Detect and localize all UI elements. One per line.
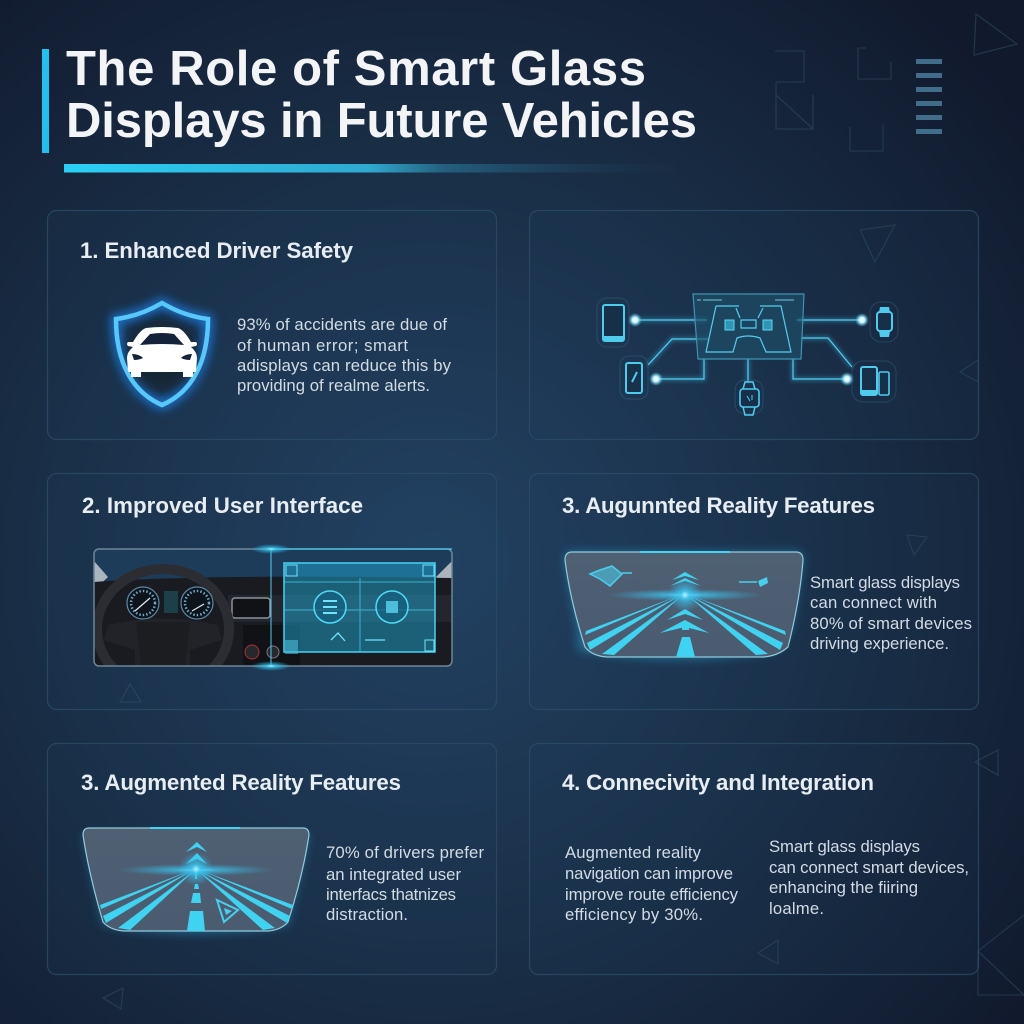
text: route efficiency: efficiency by 30%. bbox=[565, 905, 703, 924]
text: device connection: enhancing the fiiring bbox=[769, 878, 918, 897]
text: route efficiency: navigation can improve bbox=[565, 864, 733, 883]
icon: phone and tablet pair bbox=[852, 361, 896, 402]
icon: phone bbox=[597, 298, 629, 347]
text: device connection: Smart glass displays bbox=[769, 837, 920, 856]
text: smart device connection: driving experience. bbox=[810, 634, 949, 653]
panel: enhanced driver safety bbox=[48, 210, 496, 440]
panel: device connectivity diagram bbox=[530, 210, 978, 440]
panel: augmented reality features (upper) bbox=[530, 474, 978, 710]
icon: menu bars bbox=[916, 59, 942, 134]
text: accident statistic: providing of realme alerts. bbox=[237, 376, 430, 395]
icon: shield with car bbox=[116, 303, 208, 405]
heading: enhanced driver safety: 1. Enhanced Driver Safety bbox=[80, 238, 354, 263]
title underline bbox=[64, 164, 674, 172]
connector lines bbox=[628, 313, 869, 386]
icon: smartwatch bbox=[735, 380, 763, 415]
text: accident statistic: adisplays can reduce this by bbox=[237, 356, 452, 375]
text: smart device connection: can connect with bbox=[810, 593, 937, 612]
panel: improved user interface bbox=[48, 474, 496, 710]
text: driver preference statistic: interfacs thatnizes bbox=[326, 885, 456, 904]
heading: augmented reality features: 3. Augunnted Reality Features bbox=[562, 493, 875, 518]
glass head-up display with road bbox=[83, 828, 309, 934]
dashboard image with holographic display bbox=[93, 544, 453, 670]
text: driver preference statistic: distraction. bbox=[326, 905, 408, 924]
icon: tablet phone bbox=[620, 356, 648, 399]
heading: improved user interface: 2. Improved User Interface bbox=[82, 493, 363, 518]
title: The Role of Smart Glass bbox=[66, 42, 646, 96]
glass head-up display with road bbox=[565, 552, 803, 659]
title accent bar bbox=[42, 49, 49, 153]
text: device connection: can connect smart devices, bbox=[769, 858, 969, 877]
heading: connectivity and integration: 4. Connecivity and Integration bbox=[562, 770, 874, 795]
text: driver preference statistic: 70% of drivers prefer bbox=[326, 843, 484, 862]
text: route efficiency: improve route efficiency bbox=[565, 885, 739, 904]
title: Displays in Future Vehicles bbox=[66, 94, 697, 148]
text: smart device connection: Smart glass displays bbox=[810, 573, 960, 592]
text: route efficiency: Augmented reality bbox=[565, 843, 702, 862]
text: driver preference statistic: an integrated user bbox=[326, 865, 461, 884]
text: smart device connection: 80% of smart devices bbox=[810, 614, 972, 633]
panel: augmented reality features (lower) bbox=[48, 744, 496, 974]
icon: wearable device bbox=[870, 302, 898, 342]
text: device connection: loalme. bbox=[769, 899, 824, 918]
text: accident statistic: of human error; smart bbox=[237, 336, 408, 355]
text: accident statistic: 93% of accidents are due of bbox=[237, 315, 447, 334]
heading: augmented reality features: 3. Augmented Reality Features bbox=[81, 770, 401, 795]
panel: connectivity and integration bbox=[530, 744, 978, 974]
central dashboard screen bbox=[693, 294, 804, 359]
